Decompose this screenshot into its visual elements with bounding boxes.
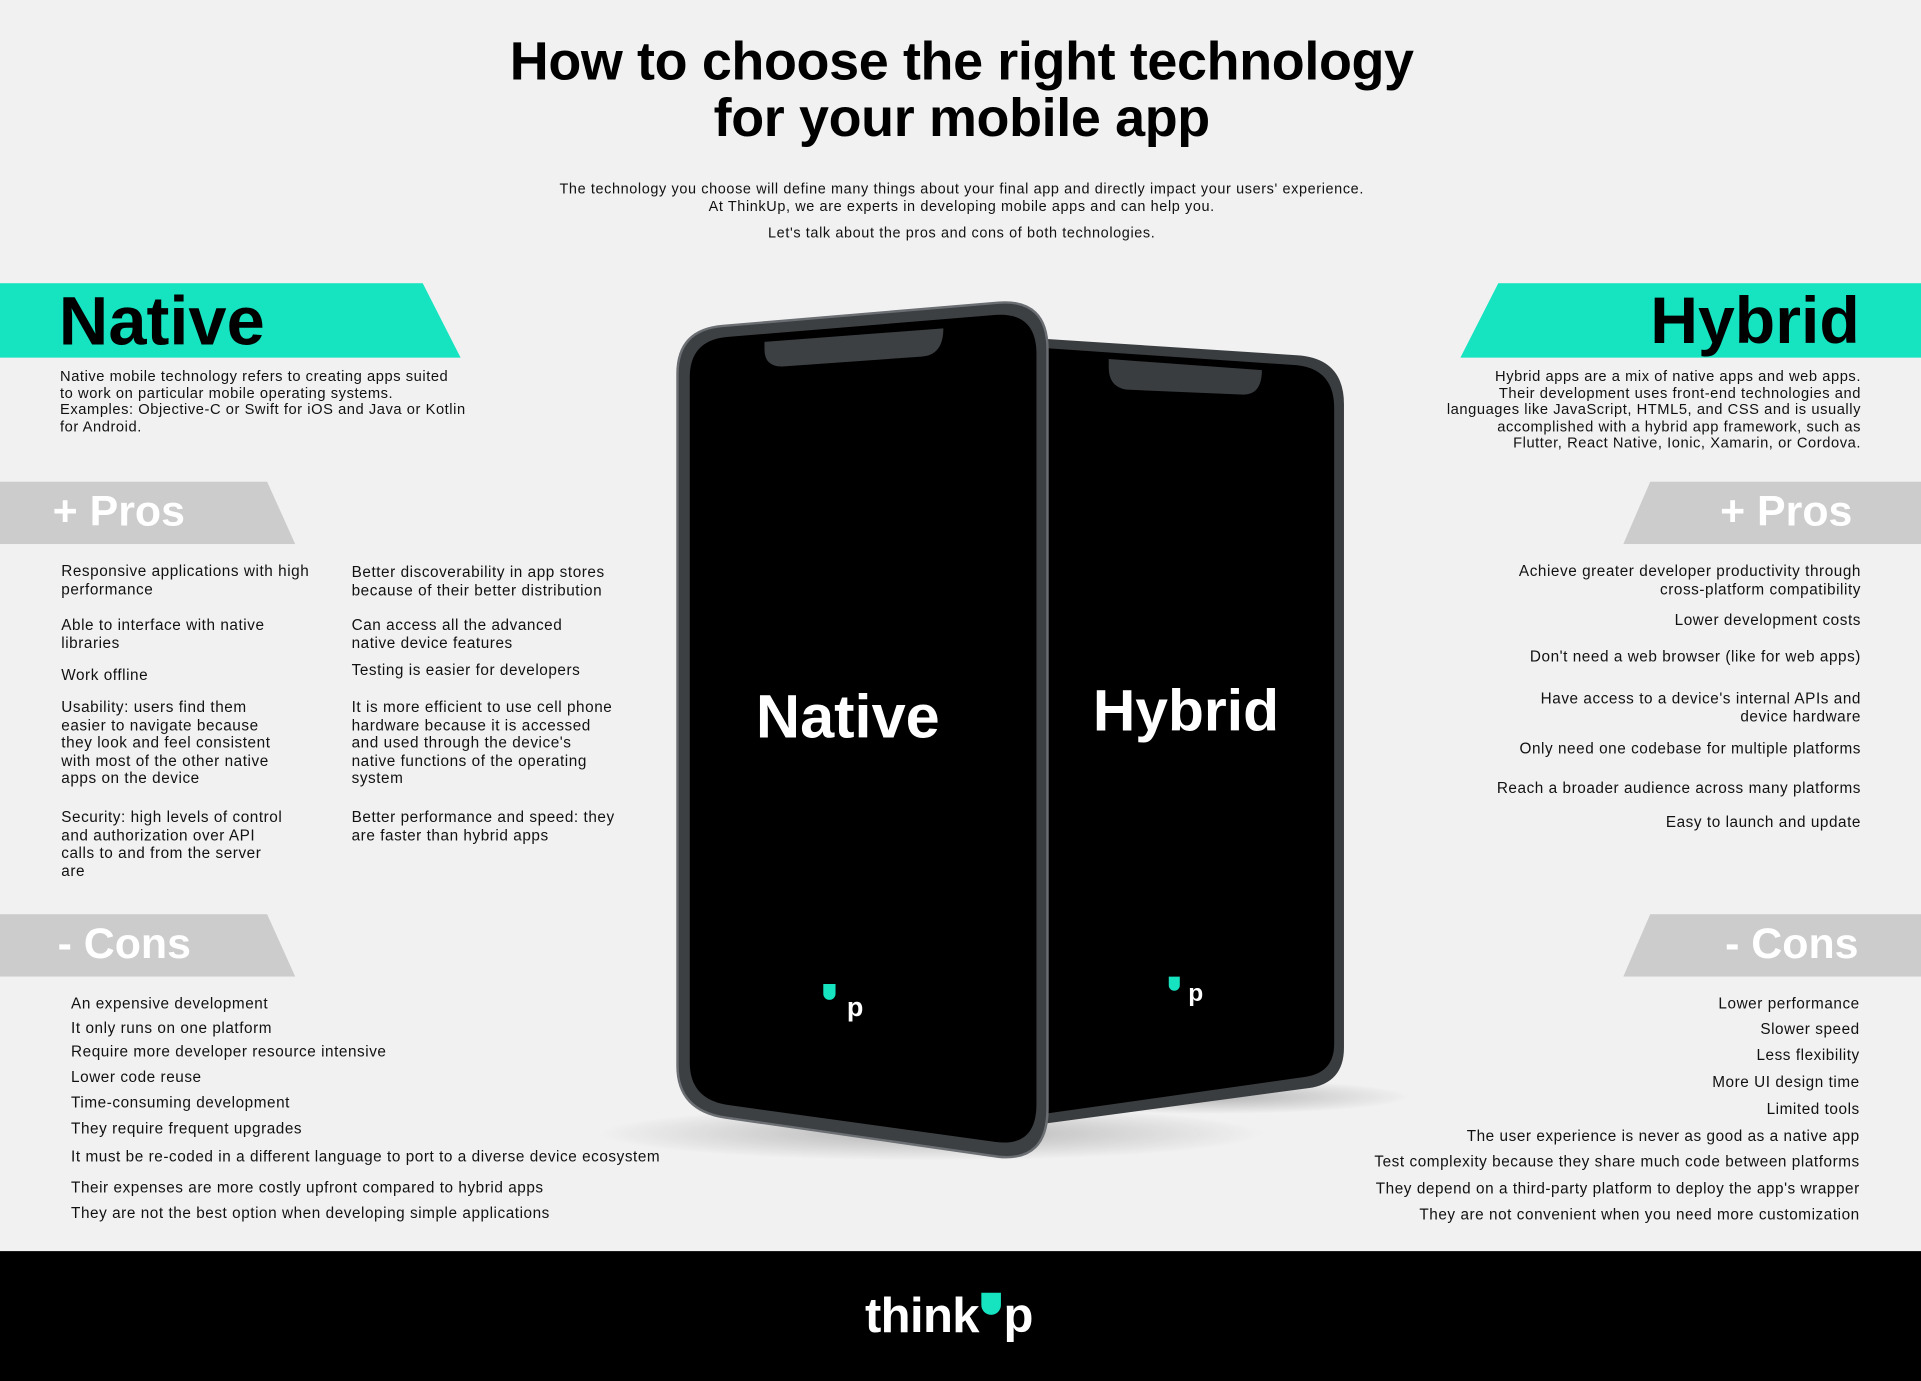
list: hybrid cons: Slower speed: [1760, 1021, 1860, 1038]
list: hybrid pros: Lower development costs: [1675, 611, 1861, 629]
text: hybrid description: languages like JavaScript, HTML5, and CSS and is usually: [1447, 401, 1861, 418]
banner: native pros: [0, 482, 295, 544]
list: hybrid cons: Lower performance: [1718, 995, 1860, 1012]
banner: hybrid pros: [1624, 482, 1921, 544]
text: native description: Native mobile technology refers to creating apps suited: [60, 368, 448, 385]
list: native pros: Testing is easier for developers: [352, 662, 580, 679]
list: native pros: Security: high levels of control and authorization over API calls to and from the server are: [61, 809, 282, 879]
list: hybrid pros: Only need one codebase for multiple platforms: [1519, 740, 1861, 757]
list: hybrid cons: Test complexity because they share much code between platforms: [1374, 1153, 1860, 1170]
list: hybrid pros: Don't need a web browser (like for web apps): [1530, 648, 1861, 665]
banner: native pros: + Pros: [53, 488, 185, 535]
list: hybrid pros: Easy to launch and update: [1666, 814, 1861, 831]
list: native cons: It only runs on one platform: [71, 1020, 272, 1037]
list: native pros: Better performance and speed: they are faster than hybrid apps: [352, 809, 615, 844]
list: native pros: Responsive applications with high performance: [61, 562, 309, 597]
banner: Hybrid: Hybrid: [1650, 284, 1860, 358]
text: native description: to work on particular mobile operating systems.: [60, 384, 393, 401]
logo: thinkUp: think p: [865, 1289, 1033, 1343]
title: [510, 32, 1414, 148]
list: native pros: Able to interface with native libraries: [61, 616, 265, 651]
text: native description: for Android.: [60, 417, 142, 434]
banner: native cons: - Cons: [58, 920, 191, 968]
icon: up logo native: p: [847, 992, 863, 1022]
icon: up logo native: [823, 984, 863, 1022]
title: for your mobile app: [714, 88, 1210, 148]
subtitle: At ThinkUp, we are experts in developing mobile apps and can help you.: [709, 197, 1215, 214]
list: hybrid cons: They are not convenient when you need more customization: [1419, 1206, 1860, 1223]
list: native cons: It must be re-coded in a different language to port to a diverse device ecosystem: [71, 1148, 660, 1165]
banner: hybrid pros: + Pros: [1720, 488, 1852, 535]
list: native cons: An expensive development: [71, 995, 268, 1012]
footer: [0, 1251, 1921, 1381]
list: native pros: Can access all the advanced native device features: [352, 616, 562, 651]
list: hybrid cons: More UI design time: [1712, 1073, 1860, 1091]
banner: hybrid cons: [1624, 914, 1921, 976]
list: native cons: They are not the best option when developing simple applications: [71, 1205, 550, 1222]
list: native pros: Better discoverability in app stores because of their better distribution: [352, 564, 605, 599]
list: native pros: Work offline: [61, 667, 148, 684]
text: hybrid description: Hybrid apps are a mix of native apps and web apps.: [1495, 368, 1861, 385]
text: hybrid description: Their development uses front-end technologies and: [1499, 384, 1861, 401]
icon: up logo hybrid: p: [1188, 980, 1203, 1007]
phone: hybrid: [1035, 338, 1344, 1125]
list: native cons: Time-consuming development: [71, 1094, 290, 1111]
banner: Native: Native: [59, 282, 265, 359]
list: native pros: It is more efficient to use cell phone hardware because it is accessed and used through the device's native functions of the operating system: [352, 698, 612, 787]
subtitle: [559, 180, 1364, 241]
list: native cons: Lower code reuse: [71, 1069, 202, 1086]
list: hybrid pros: Achieve greater developer productivity through cross-platform compatibility: [1519, 562, 1861, 597]
list: hybrid pros: Have access to a device's internal APIs and device hardware: [1541, 690, 1861, 725]
list: hybrid pros: [1497, 562, 1861, 831]
subtitle: Let's talk about the pros and cons of both technologies.: [768, 224, 1155, 241]
banner: Native: [0, 282, 460, 359]
text: hybrid description: [1447, 368, 1861, 451]
list: hybrid cons: Limited tools: [1767, 1100, 1860, 1118]
list: hybrid cons: The user experience is never as good as a native app: [1467, 1127, 1860, 1145]
banner: native cons: [0, 914, 295, 976]
phone: hybrid: Hybrid: [1093, 678, 1279, 743]
title: How to choose the right technology: [510, 32, 1414, 92]
text: native description: [60, 368, 466, 434]
list: native cons: [71, 995, 660, 1222]
banner: Hybrid: [1460, 283, 1921, 358]
list: native cons: They require frequent upgrades: [71, 1120, 302, 1137]
list: hybrid cons: [1374, 995, 1860, 1223]
subtitle: The technology you choose will define many things about your final app and directly impact your users' experience.: [559, 180, 1364, 197]
list: native pros: Usability: users find them easier to navigate because they look and feel consistent with most of the other native apps on the device: [61, 698, 271, 787]
text: hybrid description: Flutter, React Native, Ionic, Xamarin, or Cordova.: [1513, 434, 1861, 451]
phone: native: [677, 302, 1047, 1157]
phones illustration: [640, 301, 1384, 1158]
phone: native: Native: [756, 683, 940, 751]
icon: up logo hybrid: [1169, 977, 1203, 1007]
list: hybrid cons: Less flexibility: [1756, 1046, 1860, 1064]
list: native cons: Require more developer resource intensive: [71, 1043, 386, 1060]
text: hybrid description: accomplished with a hybrid app framework, such as: [1497, 417, 1861, 434]
list: native pros: [61, 562, 615, 879]
list: hybrid pros: Reach a broader audience across many platforms: [1497, 779, 1861, 796]
list: native cons: Their expenses are more costly upfront compared to hybrid apps: [71, 1179, 544, 1196]
text: native description: Examples: Objective-C or Swift for iOS and Java or Kotlin: [60, 401, 466, 418]
banner: hybrid cons: - Cons: [1725, 920, 1859, 968]
list: hybrid cons: They depend on a third-party platform to deploy the app's wrapper: [1376, 1180, 1860, 1197]
